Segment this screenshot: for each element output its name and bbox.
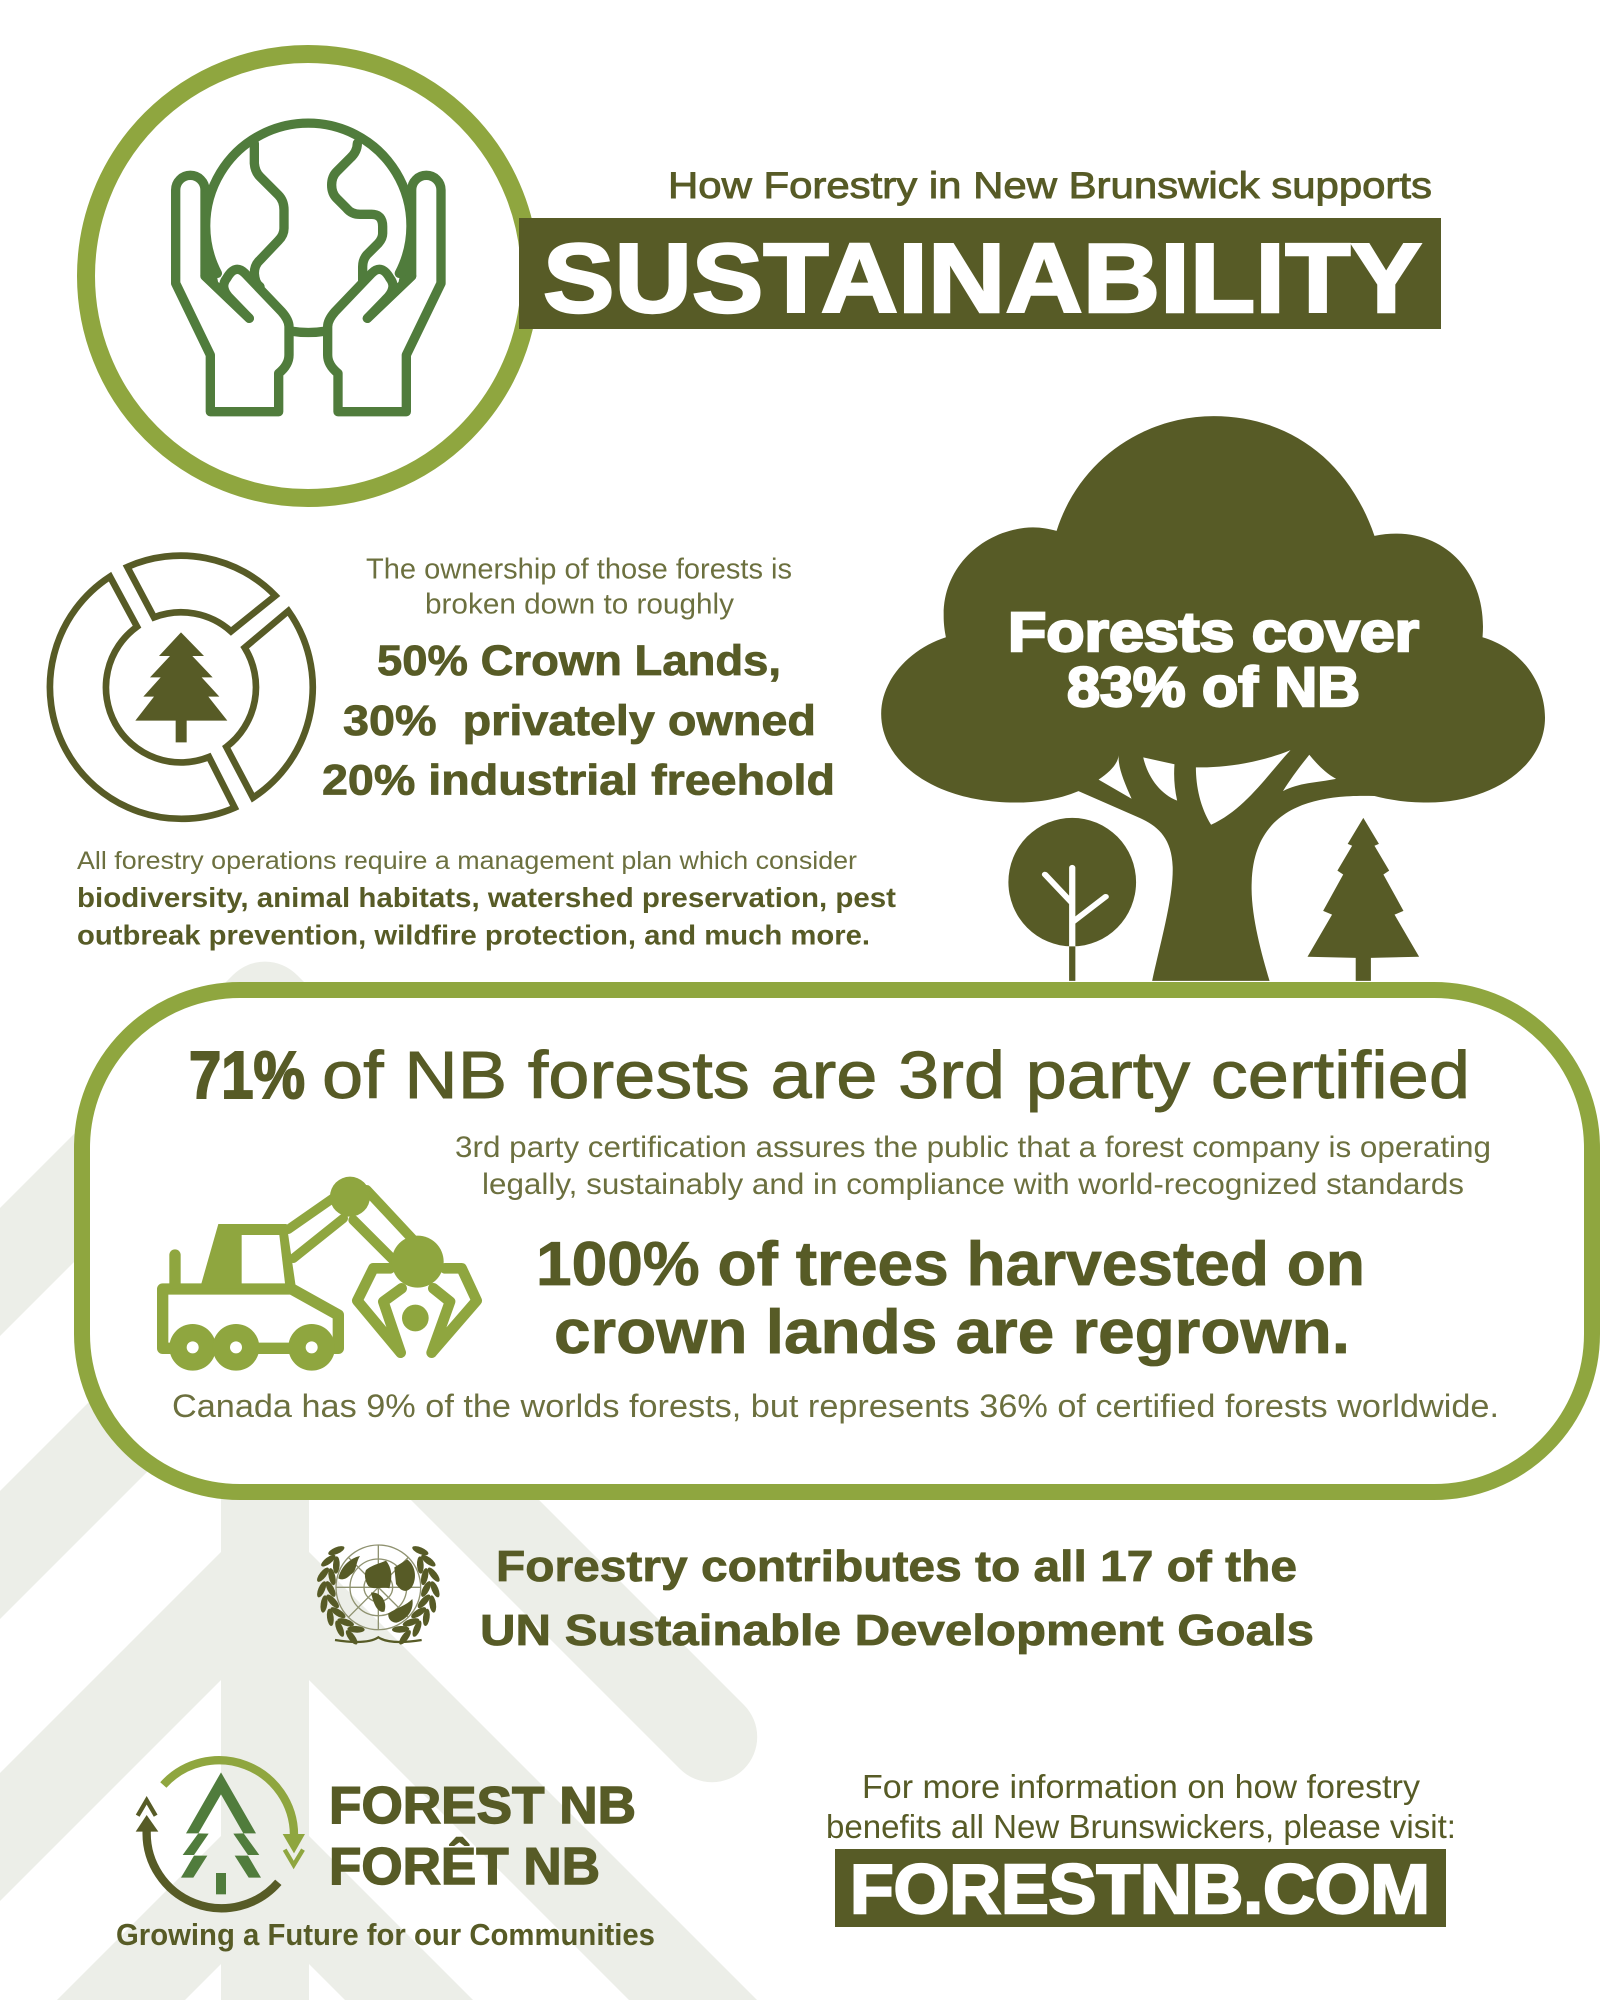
heading: UN Sustainable Development Goals: UN Sustainable Development Goals [480, 1606, 1314, 1655]
text: certification explanation [455, 1131, 1491, 1201]
text: certification explanation: 3rd party certification assures the public that a forest company is operating [455, 1131, 1491, 1164]
heading: 71% certified: of NB forests are 3rd party certified [322, 1038, 1470, 1113]
text: more information: benefits all New Brunswickers, please visit: [826, 1808, 1456, 1845]
icon: segmented ownership ring with pine [50, 556, 313, 819]
text: ownership percentages: 30% privately owned [343, 697, 816, 745]
text: management plan [77, 847, 896, 950]
title banner: SUSTAINABILITY [543, 223, 1422, 333]
text: forest ownership intro: The ownership of those forests is [366, 554, 792, 586]
heading: UN Sustainable Development Goals [480, 1542, 1314, 1655]
website banner: FORESTNB.COM [850, 1850, 1430, 1928]
text: forest ownership intro: broken down to roughly [425, 588, 734, 620]
text: management plan: outbreak prevention, wildfire protection, and much more. [77, 920, 870, 950]
tagline: Growing a Future for our Communities [116, 1917, 655, 1952]
logo wordmark: Forest NB / Forêt NB: FORÊT NB [329, 1837, 600, 1896]
text: more information [826, 1768, 1456, 1845]
text: Canada certified forests: Canada has 9% of the worlds forests, but represents 36% of certified forests worldwide. [172, 1388, 1499, 1424]
text: forests cover 83% of NB [1008, 600, 1419, 718]
heading: 100% regrown: crown lands are regrown. [554, 1298, 1350, 1367]
text: ownership percentages: 50% Crown Lands, [377, 637, 781, 685]
text: forest ownership intro [366, 554, 792, 620]
background watermark: giant pale tree [0, 962, 757, 2000]
text: ownership percentages: 20% industrial freehold [322, 756, 835, 804]
text: management plan: biodiversity, animal habitats, watershed preservation, pest [77, 882, 896, 913]
text: forests cover 83% of NB: 83% of NB [1067, 655, 1360, 718]
text: more information: For more information on how forestry [862, 1768, 1421, 1805]
icon: big tree with small trees [881, 416, 1545, 981]
heading: UN Sustainable Development Goals: Forestry contributes to all 17 of the [496, 1542, 1297, 1591]
text: ownership percentages [322, 637, 835, 804]
text: certification explanation: legally, sustainably and in compliance with world-recognized standards [482, 1168, 1464, 1201]
logo wordmark: Forest NB / Forêt NB: FOREST NB [329, 1777, 636, 1835]
text: management plan: All forestry operations require a management plan which consider [77, 847, 857, 875]
heading: 100% regrown [536, 1230, 1365, 1367]
logo: Forest NB emblem [136, 1760, 305, 1908]
panel: rounded certification box [82, 990, 1592, 1492]
heading: 100% regrown: 100% of trees harvested on [536, 1230, 1365, 1299]
logo wordmark: Forest NB / Forêt NB [329, 1777, 636, 1896]
heading: 71% certified: 71% [189, 1038, 305, 1113]
icon: forestry harvester machine [163, 1177, 477, 1371]
heading: intro line: How Forestry in New Brunswick supports [668, 165, 1432, 206]
icon: UN emblem [315, 1544, 442, 1646]
text: forests cover 83% of NB: Forests cover [1008, 600, 1419, 663]
icon: circle with hands holding globe [86, 54, 530, 498]
